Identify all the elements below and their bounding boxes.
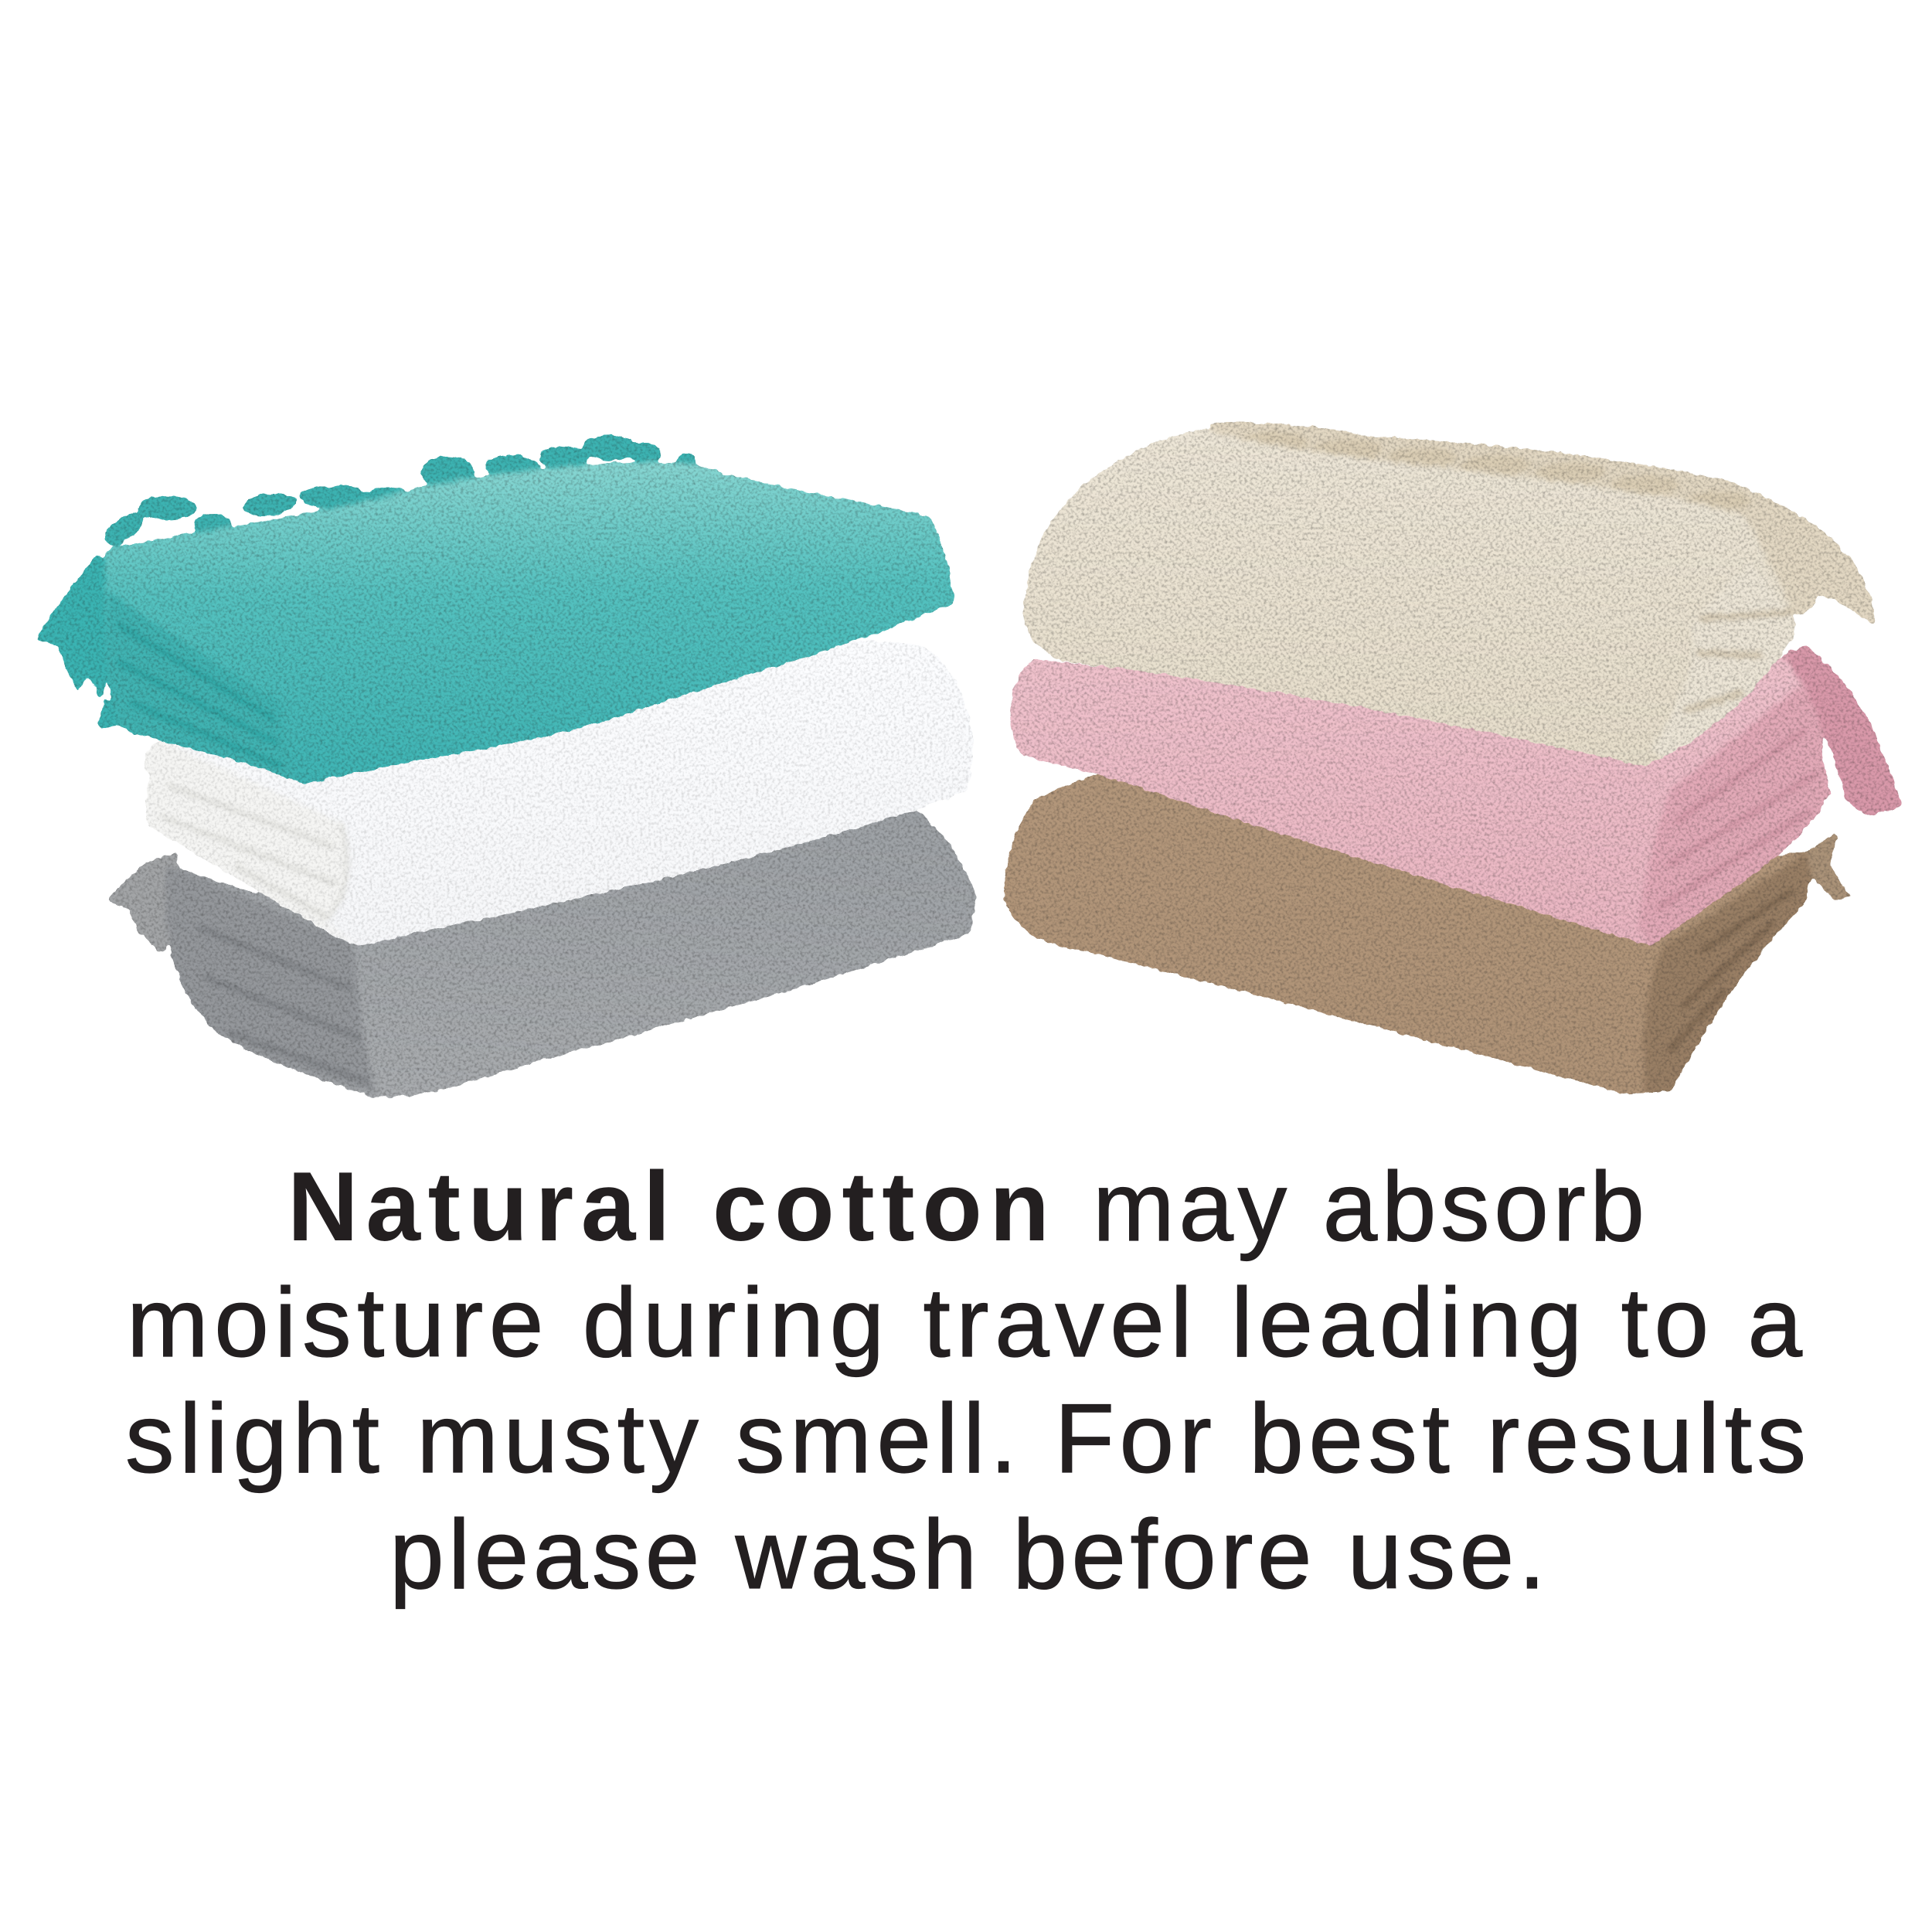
line 1 bold lead-in: Natural cotton: [287, 1151, 1049, 1261]
teal knot chain: [99, 435, 696, 551]
teal tassel: [35, 554, 115, 702]
pink tassel: [1783, 645, 1902, 816]
left stack of folded throws: [35, 435, 977, 1097]
line 2: moisture during travel leading to a: [127, 1267, 1802, 1377]
teal throw with knotted fringe: [35, 435, 954, 785]
caption text: [125, 1151, 1806, 1609]
right stack of folded throws: [1004, 422, 1902, 1094]
gray throw: [105, 798, 977, 1097]
pink throw with tassel: [1011, 645, 1902, 946]
brown throw: [1004, 769, 1851, 1094]
line 4: please wash before use.: [389, 1499, 1546, 1609]
line 3: slight musty smell. For best results: [125, 1383, 1806, 1493]
line 1 regular: may absorb: [1093, 1151, 1645, 1261]
beige fringe: [1206, 422, 1875, 626]
beige throw with knotted fringe: [1023, 422, 1875, 767]
white throw: [144, 641, 973, 946]
